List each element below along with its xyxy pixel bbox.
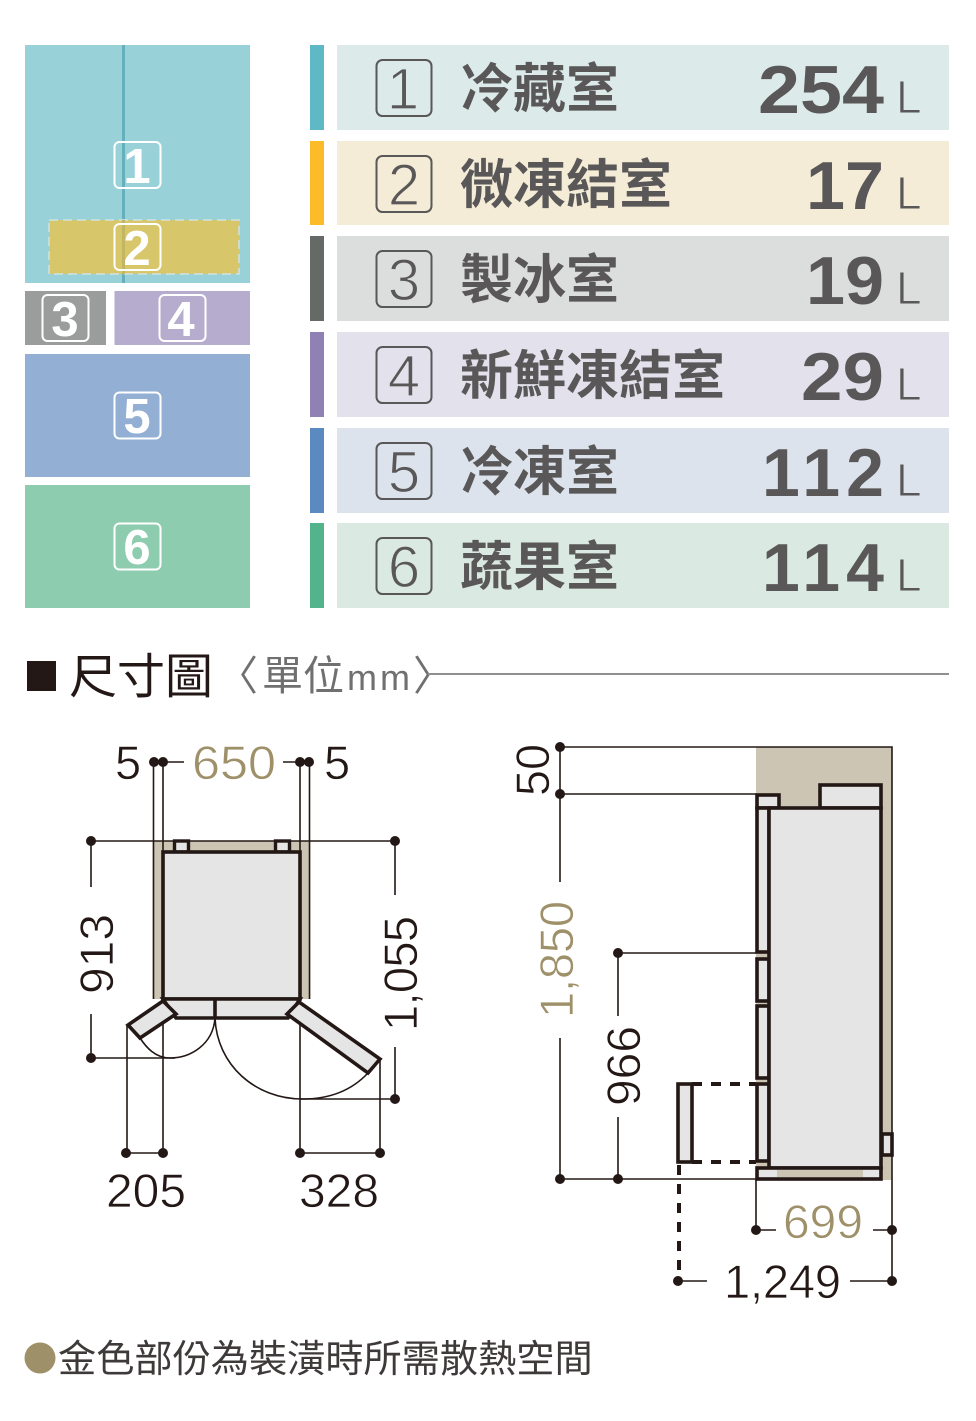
row 4: 新鮮凍結室 29 L: L	[896, 358, 922, 410]
row 1: 冷藏室 254 L: 1	[387, 57, 419, 122]
row 6: 蔬果室 114 L	[310, 523, 949, 608]
hinges	[174, 841, 290, 852]
row 3: 製冰室 19 L: 3	[388, 248, 420, 313]
row 3: 製冰室 19 L	[310, 236, 949, 321]
row 5: 冷凍室 112 L: 5	[388, 440, 420, 505]
row 4: 新鮮凍結室 29 L: 新鮮凍結室	[460, 347, 725, 406]
compartment 1 block	[25, 45, 250, 283]
row 6: 蔬果室 114 L: 114	[762, 530, 884, 606]
row 1: 冷藏室 254 L: 冷藏室	[460, 60, 619, 119]
cabinet body	[163, 852, 300, 999]
compartment 5 block	[25, 354, 250, 477]
compartment 6 block	[25, 485, 250, 608]
compartment 2 block	[49, 220, 239, 276]
dimension labels top view: 328	[299, 1164, 379, 1217]
section heading: dimensions: 〈	[217, 653, 258, 699]
right open door	[287, 1002, 380, 1073]
section heading: dimensions	[27, 651, 949, 704]
top hinge box	[757, 795, 779, 808]
row 3: 製冰室 19 L: 19	[806, 243, 884, 319]
row 2: 微凍結室 17 L: 2	[388, 153, 420, 218]
body side view	[769, 808, 881, 1168]
dimension lines top view	[86, 757, 400, 1158]
section heading: dimensions: 尺寸圖	[69, 651, 213, 704]
clearance area	[152, 841, 310, 999]
fridge compartment map	[25, 45, 250, 608]
capacity table	[310, 45, 949, 608]
row 1: 冷藏室 254 L: L	[896, 71, 922, 123]
dimension labels top view: 1,055	[374, 916, 427, 1031]
row 6: 蔬果室 114 L: 6	[388, 535, 420, 600]
row 5: 冷凍室 112 L: 冷凍室	[460, 443, 619, 502]
dimension labels top view	[70, 736, 427, 1217]
base	[757, 1168, 881, 1179]
door band	[163, 999, 300, 1018]
rear stopper	[882, 1134, 892, 1155]
compartment 1 block: 1	[123, 140, 151, 194]
section heading: dimensions: mm	[347, 657, 410, 698]
row 6: 蔬果室 114 L: L	[896, 549, 922, 601]
row 5: 冷凍室 112 L: 112	[762, 435, 884, 511]
dimension labels top view: 650	[192, 736, 276, 789]
compartment 4 block	[114, 291, 250, 347]
row 3: 製冰室 19 L: L	[896, 262, 922, 314]
row 1: 冷藏室 254 L: 254	[758, 52, 884, 128]
row 2: 微凍結室 17 L: L	[896, 167, 922, 219]
compartment 5 block: 5	[123, 390, 151, 444]
top view diagram	[70, 736, 427, 1217]
row 2: 微凍結室 17 L	[310, 141, 949, 225]
row 5: 冷凍室 112 L	[310, 428, 949, 513]
dimension lines side view	[555, 742, 897, 1286]
dimension labels side view: 1,249	[724, 1255, 841, 1308]
legend note: 金色部份為裝潢時所需散熱空間	[58, 1338, 593, 1381]
side view diagram	[506, 742, 897, 1308]
dimension labels top view: 5	[324, 736, 350, 789]
dimension labels side view: 1,850	[530, 901, 583, 1018]
compartment 2 block: 2	[123, 222, 151, 276]
row 5: 冷凍室 112 L: L	[896, 454, 922, 506]
compartment 3 block: 3	[51, 293, 79, 347]
row 1: 冷藏室 254 L	[310, 45, 949, 130]
dimension labels side view	[506, 744, 863, 1308]
compartment 3 block	[25, 291, 106, 347]
dimension labels top view: 205	[106, 1164, 186, 1217]
section heading: dimensions: 〉	[413, 653, 454, 699]
dimension labels top view: 913	[70, 914, 123, 994]
doors side view	[757, 808, 769, 1161]
dimension labels top view: 5	[115, 736, 141, 789]
row 6: 蔬果室 114 L: 蔬果室	[460, 538, 619, 597]
dimension labels side view: 966	[597, 1026, 650, 1106]
row 4: 新鮮凍結室 29 L	[310, 332, 949, 417]
dimension labels side view: 699	[783, 1195, 863, 1248]
pull-out drawer	[678, 1084, 756, 1281]
row 2: 微凍結室 17 L: 微凍結室	[460, 156, 672, 215]
row 3: 製冰室 19 L: 製冰室	[460, 251, 619, 310]
clearance area side	[756, 747, 892, 1180]
left open door	[128, 1001, 176, 1038]
row 4: 新鮮凍結室 29 L: 29	[801, 339, 884, 415]
row 4: 新鮮凍結室 29 L: 4	[388, 344, 420, 409]
compartment 4 block: 4	[167, 293, 195, 347]
section heading: dimensions: 單位	[262, 653, 344, 699]
row 2: 微凍結室 17 L: 17	[806, 148, 884, 224]
top vent box	[820, 785, 881, 808]
compartment 6 block: 6	[123, 521, 151, 575]
dimension labels side view: 50	[506, 744, 559, 796]
